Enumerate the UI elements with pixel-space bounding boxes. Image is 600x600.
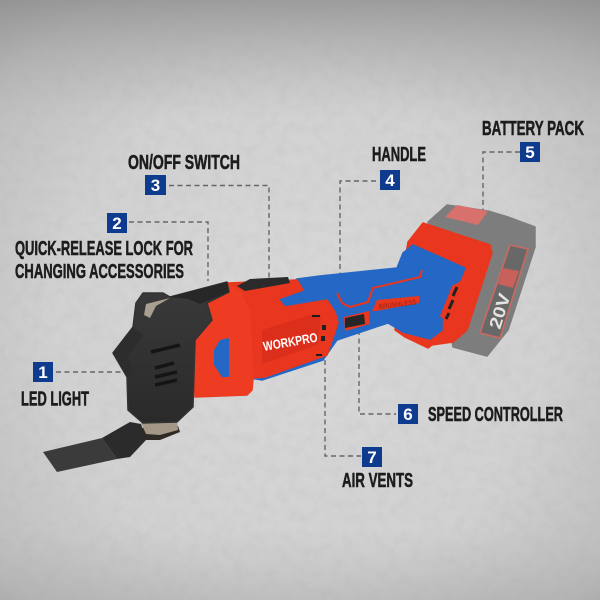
callout 3: on/off switch: ON/OFF SWITCH — [128, 152, 240, 174]
callout 2: quick-release lock: 2 — [112, 214, 122, 233]
blue handle — [250, 245, 465, 380]
battery pack: 20V — [486, 290, 515, 331]
callout 4: handle — [372, 144, 426, 190]
callout 5: battery pack: 5 — [525, 143, 535, 162]
callout 1: LED light: 1 — [38, 363, 48, 382]
callout 7: air vents: AIR VENTS — [342, 470, 413, 492]
dashed leader lines — [56, 152, 520, 456]
callout 2: quick-release lock: QUICK-RELEASE LOCK FOR — [15, 238, 193, 260]
multi-tool product illustration — [43, 205, 535, 472]
brand logo: WORKPRO — [262, 330, 319, 354]
power switch — [237, 277, 290, 291]
blade — [43, 420, 180, 472]
callout 6: speed controller — [398, 404, 563, 426]
callout 6: speed controller: 6 — [403, 405, 413, 424]
callout 7: air vents: 7 — [367, 448, 377, 467]
callout 4: handle: HANDLE — [372, 144, 426, 166]
callout 1: LED light — [21, 362, 89, 410]
callout 1: LED light: LED LIGHT — [21, 388, 89, 410]
callout 2: quick-release lock — [15, 213, 193, 283]
callout 5: battery pack — [482, 118, 584, 162]
rear red housing — [395, 223, 492, 348]
callout 7: air vents — [342, 447, 413, 492]
battery pack — [428, 205, 535, 356]
blue handle: BRUSHLESS — [378, 299, 417, 311]
callout 4: handle: 4 — [385, 171, 395, 190]
red motor housing — [193, 277, 338, 397]
callout 3: on/off switch: 3 — [151, 176, 160, 195]
black head — [113, 282, 229, 423]
icon: blue side badge — [214, 338, 229, 377]
callout 2: quick-release lock: CHANGING ACCESSORIES — [15, 261, 184, 283]
callout 3: on/off switch — [128, 152, 240, 195]
